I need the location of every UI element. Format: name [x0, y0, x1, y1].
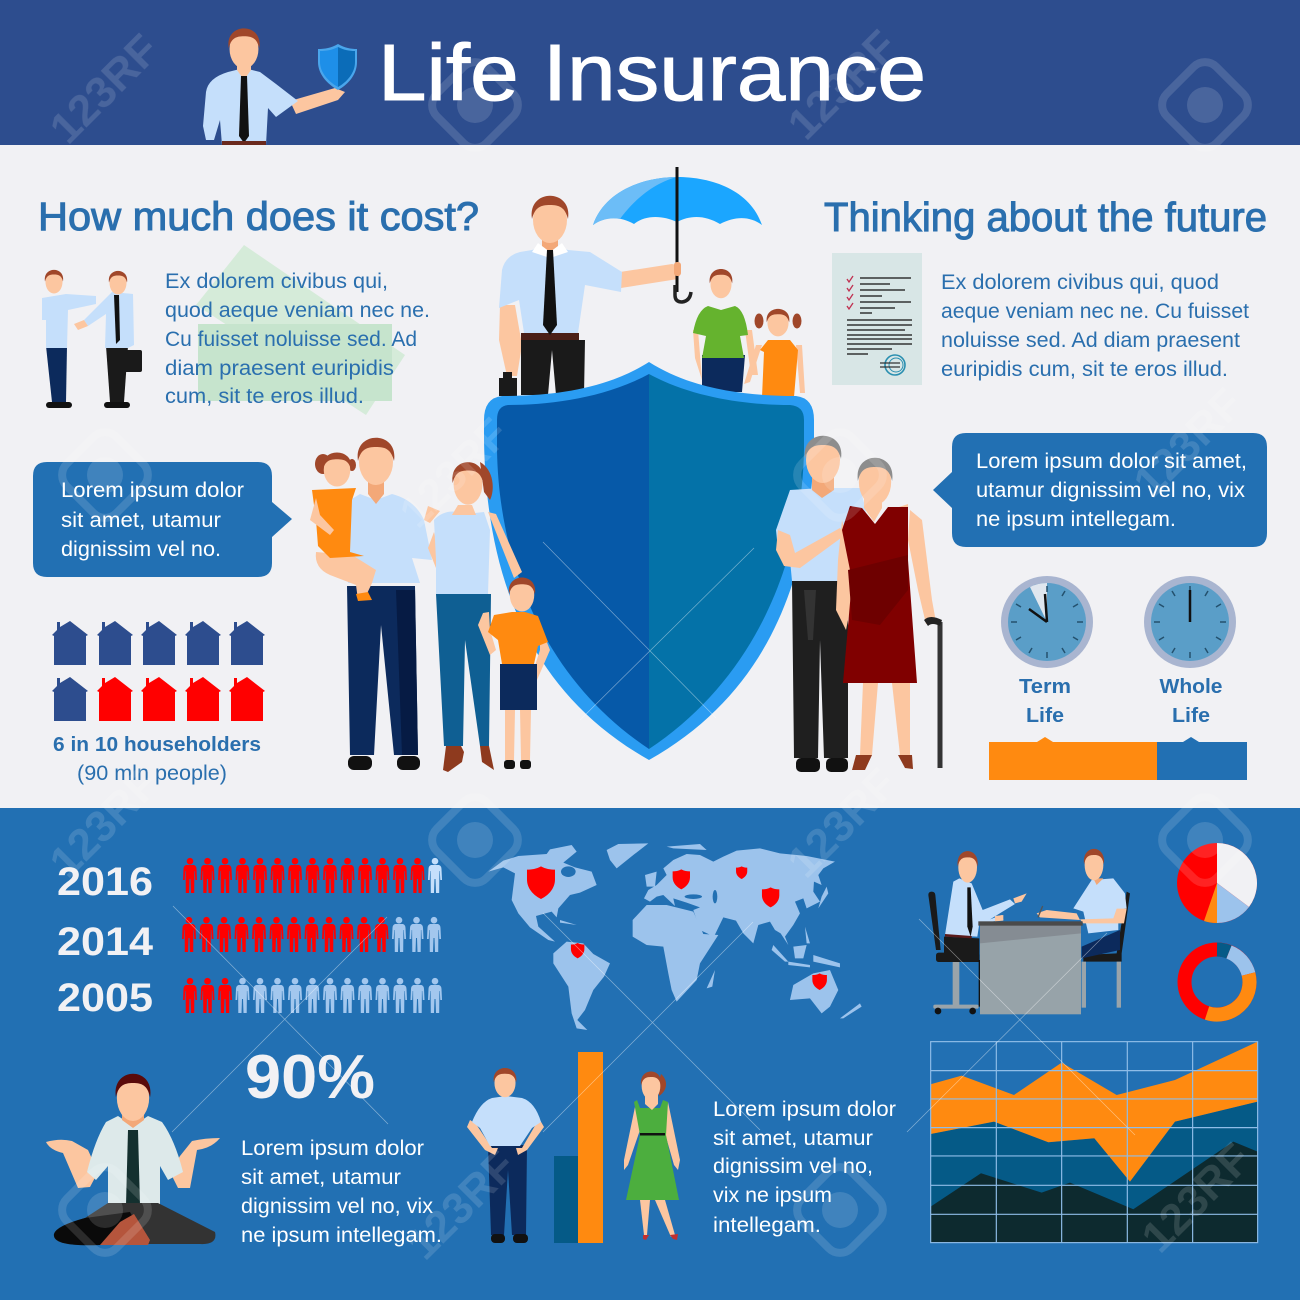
text block: future description: noluisse sed. Ad diam praesent [941, 329, 1240, 352]
heading: how much does it cost: How much does it cost? [38, 195, 479, 239]
elderly couple [776, 436, 942, 772]
icon: two men shaking hands [42, 270, 142, 408]
text block: cost description: Ex dolorem civibus qui, [165, 270, 388, 293]
text block: 90% description [241, 1137, 442, 1247]
icon: walking cane [924, 617, 942, 768]
callout: left speech bubble: sit amet, utamur [61, 509, 221, 532]
people chart: 2016 [57, 858, 442, 904]
grandfather [776, 436, 908, 772]
text block: cost description [165, 270, 430, 408]
bottom panel background [0, 808, 1300, 1300]
text: 123RF [40, 759, 168, 887]
daughter carried [310, 453, 376, 601]
callout: left speech bubble [33, 462, 292, 577]
text block: bar chart description [713, 1098, 896, 1237]
text block: bar chart description: intellegam. [713, 1214, 821, 1237]
text block: future description: euripidis cum, sit te eros illud. [941, 358, 1228, 381]
desk [978, 921, 1083, 1014]
text: 123RF [1132, 1134, 1260, 1262]
stat label: 6 in 10 householders [53, 734, 261, 785]
text block: future description [941, 271, 1249, 381]
labels: term life and whole life: Life [1172, 705, 1210, 727]
icon: policy document [832, 253, 922, 385]
meditating man [46, 1074, 220, 1245]
area chart [931, 1042, 1258, 1243]
family with two children [310, 438, 550, 772]
people chart: 2014 [57, 917, 441, 964]
woman figure in green dress [624, 1071, 680, 1240]
donut chart [1184, 950, 1250, 1015]
text block: 90% description: Lorem ipsum dolor [241, 1137, 424, 1160]
world map with shield markers [488, 843, 862, 1030]
text block: cost description: diam praesent euripidis [165, 357, 394, 380]
icon: briefcase [499, 372, 517, 396]
right man [1037, 849, 1127, 958]
icon: large shield [484, 362, 814, 760]
text block: cost description: Cu fuisset noluisse sed. Ad [165, 328, 417, 351]
text: 123RF [390, 409, 518, 537]
text: 123RF [778, 21, 906, 149]
labels: term life and whole life: Term [1019, 676, 1071, 698]
left man [944, 851, 1027, 1007]
people chart: 2014: 2014 [57, 920, 154, 964]
stat: 90%: 90% [245, 1043, 375, 1112]
text: 123RF [778, 759, 906, 887]
clock: term life [1001, 576, 1093, 668]
text block: 90% description: sit amet, utamur [241, 1166, 401, 1189]
callout: left speech bubble: Lorem ipsum dolor [61, 479, 244, 502]
right chair [1082, 892, 1130, 1008]
title: Life Insurance [378, 28, 926, 117]
text block: bar chart description: vix ne ipsum [713, 1184, 832, 1207]
money illustration [196, 245, 405, 415]
pie chart [1177, 843, 1257, 923]
text block: 90% description: ne ipsum intellegam. [241, 1224, 442, 1247]
office meeting scene [928, 849, 1130, 1014]
house pictogram chart: 6 in 10 [52, 621, 265, 721]
text block: future description: Ex dolorem civibus qui, quod [941, 271, 1219, 294]
text block: 90% description: dignissim vel no, vix [241, 1195, 434, 1218]
stat label: 6 in 10 householders: 6 in 10 householders [53, 734, 261, 756]
clock: whole life [1144, 576, 1236, 668]
stacked bar: term vs whole life [989, 737, 1247, 780]
text: 123RF [1124, 379, 1252, 507]
people chart: 2005: 2005 [57, 976, 153, 1020]
text block: bar chart description: dignissim vel no, [713, 1155, 873, 1178]
heading: thinking about the future: Thinking about the future [824, 194, 1267, 240]
header band [0, 0, 1300, 145]
labels: term life and whole life: Whole [1160, 676, 1222, 698]
icon: small shield [318, 44, 357, 90]
grandmother [836, 458, 936, 770]
callout: right speech bubble [933, 433, 1267, 547]
icon: man presenting shield [203, 28, 357, 145]
callout: left speech bubble: dignissim vel no. [61, 538, 221, 561]
text block: bar chart description: Lorem ipsum dolor [713, 1098, 896, 1121]
text block: cost description: quod aeque veniam nec ne. [165, 299, 430, 322]
son [478, 578, 550, 769]
father [342, 438, 440, 770]
father with umbrella on shield [499, 196, 681, 396]
callout: right speech bubble: ne ipsum intellegam. [976, 508, 1176, 531]
people chart: 2005 [57, 976, 442, 1020]
mother [428, 462, 522, 772]
stat label: 6 in 10 householders: (90 mln people) [77, 762, 227, 785]
text block: future description: aeque veniam nec ne. Cu fuisset [941, 300, 1249, 323]
labels: term life and whole life: Life [1026, 705, 1064, 727]
people chart: 2016: 2016 [57, 860, 153, 904]
bar chart: two bars [554, 1052, 603, 1243]
text: 123RF [40, 25, 168, 153]
left chair [928, 892, 979, 1014]
icon: umbrella [593, 167, 762, 302]
callout: right speech bubble: utamur dignissim vel no, vix [976, 479, 1246, 502]
labels: term life and whole life [1019, 676, 1222, 727]
text block: cost description: cum, sit te eros illud. [165, 385, 364, 408]
text block: bar chart description: sit amet, utamur [713, 1127, 873, 1150]
children behind shield [693, 269, 805, 397]
callout: right speech bubble: Lorem ipsum dolor sit amet, [976, 450, 1247, 473]
text: 123RF [397, 1141, 525, 1269]
man figure beside bar chart [467, 1068, 544, 1243]
